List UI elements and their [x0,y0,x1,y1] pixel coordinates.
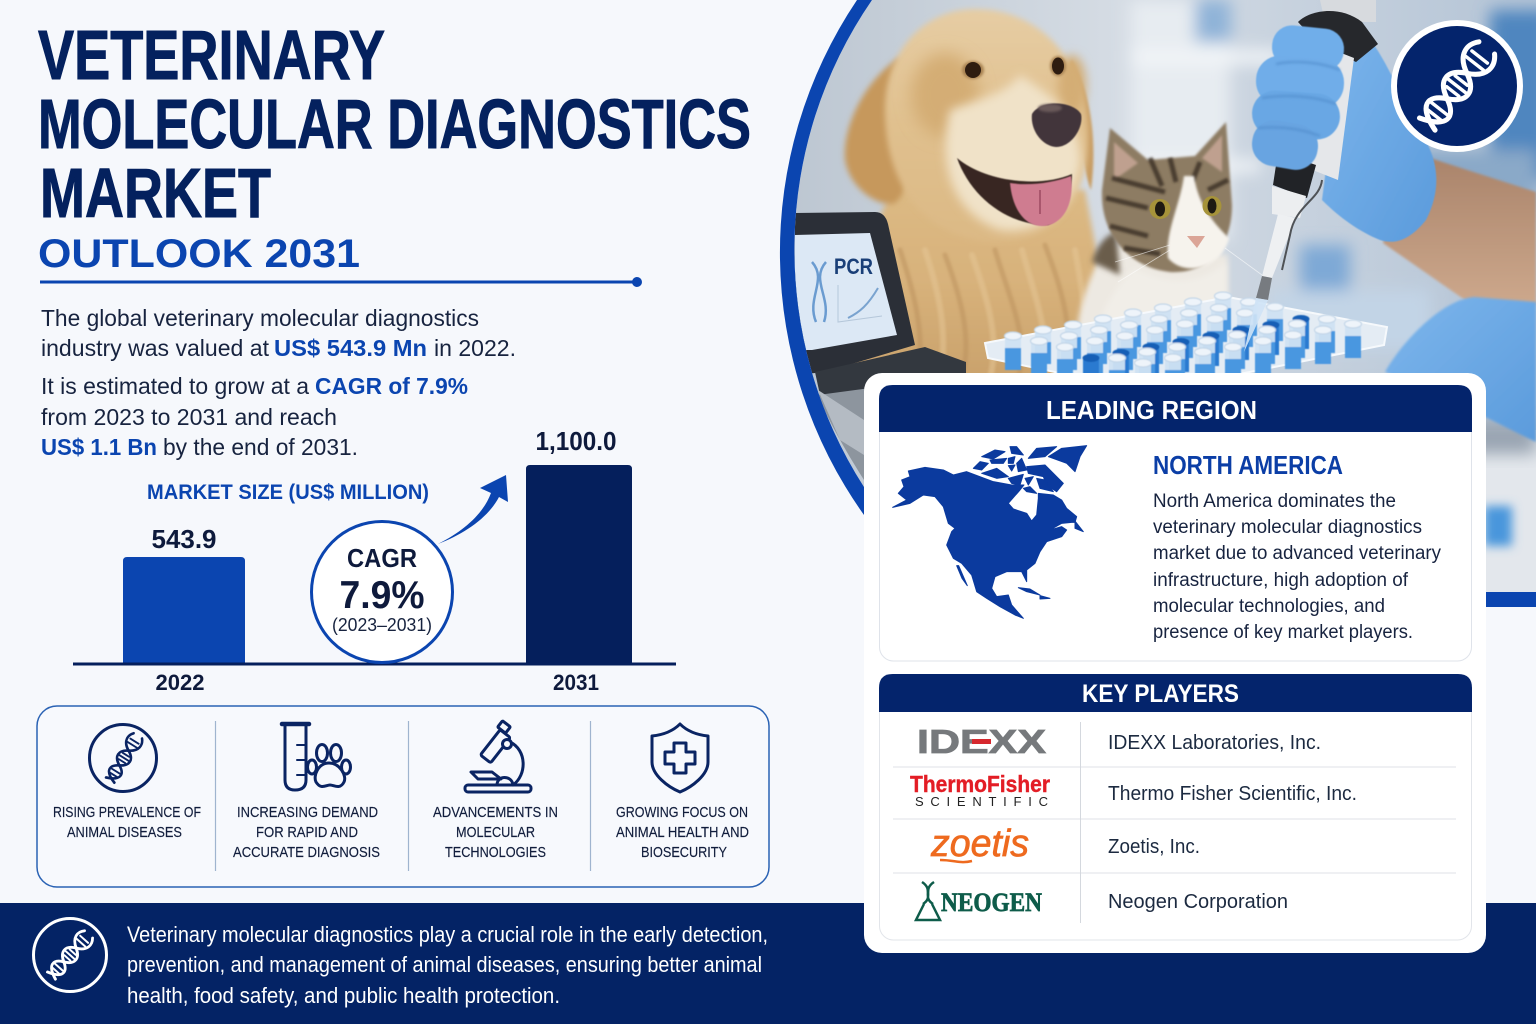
company names: Thermo Fisher Scientific, Inc. [1108,783,1357,805]
driver 3: technologies [433,721,558,861]
logo: Neogen: NEOGEN [941,888,1042,917]
driver 2: demand for diagnosis: INCREASING DEMAND [237,805,378,821]
year 2022: 2022 [156,670,204,695]
dog ears [845,57,915,204]
intro paragraph: US$ 1.1 Bn [41,434,157,460]
palm of glove [1322,25,1436,242]
company names [1108,732,1357,913]
title: VETERINARY [38,16,385,94]
icon: test tube and paw [282,724,350,790]
title: MOLECULAR DIAGNOSTICS [38,85,751,163]
region description: market due to advanced veterinary [1153,543,1441,564]
region description [1153,491,1441,643]
footer text: Veterinary molecular diagnostics play a crucial role in the early detection, [127,922,768,947]
tube rack [984,291,1388,373]
lower glove [1385,297,1536,442]
logo: Thermo Fisher Scientific: ThermoFisher [910,771,1050,797]
gloved hand [1249,23,1536,442]
CAGR circle: CAGR [347,543,417,573]
company names: Neogen Corporation [1108,891,1288,913]
driver 4: biosecurity: ANIMAL HEALTH AND [616,825,749,841]
subtitle rule with dot [40,277,642,287]
intro paragraph: The global veterinary molecular diagnostics [41,305,479,331]
icon: DNA in circle [90,724,156,792]
intro paragraph: from 2023 to 2031 and reach [41,404,337,430]
dog eyes [962,61,984,79]
bar 2031 [526,465,632,664]
cat nose [1187,236,1205,248]
company names: IDEXX Laboratories, Inc. [1108,732,1321,754]
region description: presence of key market players. [1153,622,1413,643]
panel: right white card [864,373,1486,953]
logo: Neogen [916,882,1042,920]
intro paragraph: by the end of 2031. [163,434,358,460]
laptop with PCR screen: PCR [834,254,873,279]
dog muzzle [946,75,1081,231]
panel: key players [879,674,1472,940]
driver 4: biosecurity [616,724,749,861]
axis [73,662,676,666]
value 2031: 1,100.0 [536,426,616,456]
panel: leading region [879,385,1472,661]
title [38,16,751,232]
blue arc framing the photo [780,0,872,515]
year 2031: 2031 [553,670,599,695]
icon: shield with cross [652,724,708,792]
arm [1383,150,1536,305]
bar 2022 [123,557,245,664]
laptop with PCR screen [795,212,968,480]
intro paragraph: It is estimated to grow at a [41,373,309,399]
dog mouth [957,158,1072,225]
intro paragraph: CAGR of 7.9% [315,373,468,399]
intro paragraph: US$ 543.9 Mn [274,335,427,361]
table surface [1486,430,1536,592]
driver 2: demand for diagnosis: ACCURATE DIAGNOSIS [233,845,380,861]
driver 1: rising prevalence: ANIMAL DISEASES [67,825,182,841]
driver 3: technologies: ADVANCEMENTS IN [433,805,558,821]
driver 1: rising prevalence [53,724,201,841]
region description: veterinary molecular diagnostics [1153,517,1422,538]
footer text: prevention, and management of animal diseases, ensuring better animal [127,952,762,977]
panel: key players: KEY PLAYERS [1082,680,1239,708]
cat [1074,122,1262,324]
logo: Zoetis: zoetis [930,823,1029,865]
icon: microscope [465,721,531,792]
hero photo: vet lab scene with dog, cat and pipette [780,0,1536,592]
region description: molecular technologies, and [1153,596,1385,617]
cat eyes [1150,199,1170,219]
CAGR circle [312,522,452,662]
footer text: health, food safety, and public health protection. [127,983,560,1008]
logo: Thermo Fisher Scientific [910,771,1050,809]
pipette [1244,0,1378,352]
subtitle: OUTLOOK 2031 [38,232,360,276]
driver 3: technologies: TECHNOLOGIES [445,845,546,861]
cat head [1102,122,1232,272]
logo: Thermo Fisher Scientific: SCIENTIFIC [915,794,1048,809]
dog head [882,6,1090,191]
region description: North America dominates the [1153,491,1396,512]
driver 2: demand for diagnosis: FOR RAPID AND [256,825,358,841]
panel: leading region: LEADING REGION [1046,395,1257,425]
driver 4: biosecurity: GROWING FOCUS ON [616,805,748,821]
CAGR arrow [438,475,508,544]
icon: DNA in white circle [34,918,106,992]
region description: infrastructure, high adoption of [1153,570,1409,591]
dog nose [1032,104,1081,147]
footer text [127,922,768,1008]
blue accent bar at right edge [1486,592,1536,607]
map: North America [893,446,1087,618]
title: MARKET [40,154,271,232]
panel: market drivers [37,706,769,887]
intro paragraph: industry was valued at [41,335,270,361]
market size bar chart [73,426,676,695]
intro paragraph [41,305,516,460]
chart title: MARKET SIZE (US$ MILLION) [147,481,429,504]
value 2022: 543.9 [152,524,216,554]
logo: IDEXX: IDEXX [917,723,1046,760]
company names: Zoetis, Inc. [1108,836,1200,858]
footer band [0,903,1536,1024]
region name: NORTH AMERICA [1153,450,1343,480]
driver 3: technologies: MOLECULAR [456,825,535,841]
intro paragraph: in 2022. [434,335,516,361]
driver 1: rising prevalence: RISING PREVALENCE OF [53,805,201,821]
CAGR circle: (2023–2031) [332,615,432,635]
driver 2: demand for diagnosis [233,724,380,861]
dog [845,9,1098,390]
cat white blaze [1168,176,1229,268]
CAGR circle: 7.9% [340,574,424,617]
driver 4: biosecurity: BIOSECURITY [641,845,727,861]
DNA badge top right [1391,20,1523,152]
